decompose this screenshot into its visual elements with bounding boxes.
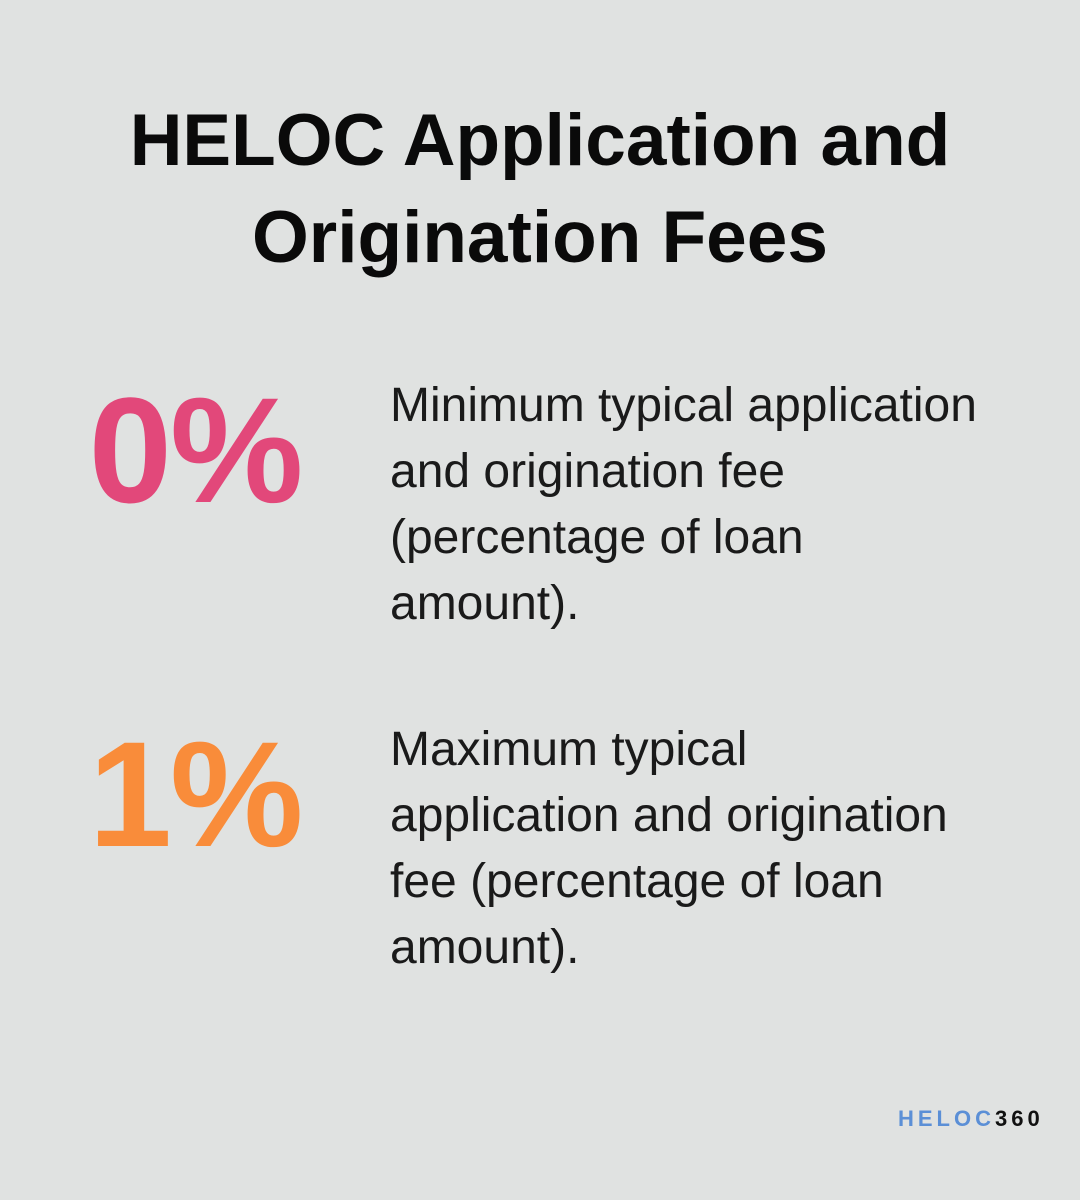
logo: HELOC360 <box>898 1106 1044 1131</box>
text: maximum fee: Maximum typical <box>390 723 747 776</box>
stat: 1%: 1% <box>89 710 301 878</box>
text: minimum fee: and origination fee <box>390 445 785 498</box>
text: minimum fee: Minimum typical application <box>390 379 977 432</box>
text: maximum fee: fee (percentage of loan <box>390 855 884 908</box>
title: Origination Fees <box>252 197 828 278</box>
text: maximum fee: amount). <box>390 921 579 974</box>
text: minimum fee: (percentage of loan <box>390 511 804 564</box>
title: HELOC Application and <box>130 100 950 181</box>
title <box>130 100 950 278</box>
text: minimum fee: amount). <box>390 577 579 630</box>
text: maximum fee: application and origination <box>390 789 948 842</box>
text: maximum fee <box>390 723 948 974</box>
text: minimum fee <box>390 379 977 630</box>
stat: 0%: 0% <box>89 366 301 534</box>
